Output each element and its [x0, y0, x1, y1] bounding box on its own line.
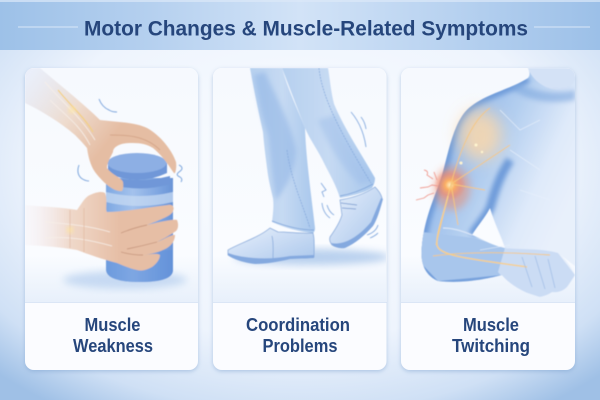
caption: Twitching [452, 336, 530, 356]
caption [25, 302, 198, 356]
title: Motor Changes & Muscle-Related Symptoms [84, 18, 528, 40]
panel: muscle twitching [401, 68, 580, 370]
illustration: hands gripping a jar [25, 68, 187, 289]
caption: Weakness [73, 336, 153, 356]
caption: Coordination [246, 315, 350, 335]
illustration: arm with glowing nerves [416, 68, 580, 297]
caption: Problems [262, 336, 338, 356]
caption [401, 302, 575, 356]
caption: Muscle [463, 315, 519, 335]
panel: muscle weakness [25, 68, 198, 370]
header band [0, 0, 600, 50]
caption: Muscle [84, 315, 140, 335]
illustration: legs stumbling [228, 68, 390, 265]
panel: coordination problems [213, 68, 390, 370]
caption [213, 302, 386, 356]
